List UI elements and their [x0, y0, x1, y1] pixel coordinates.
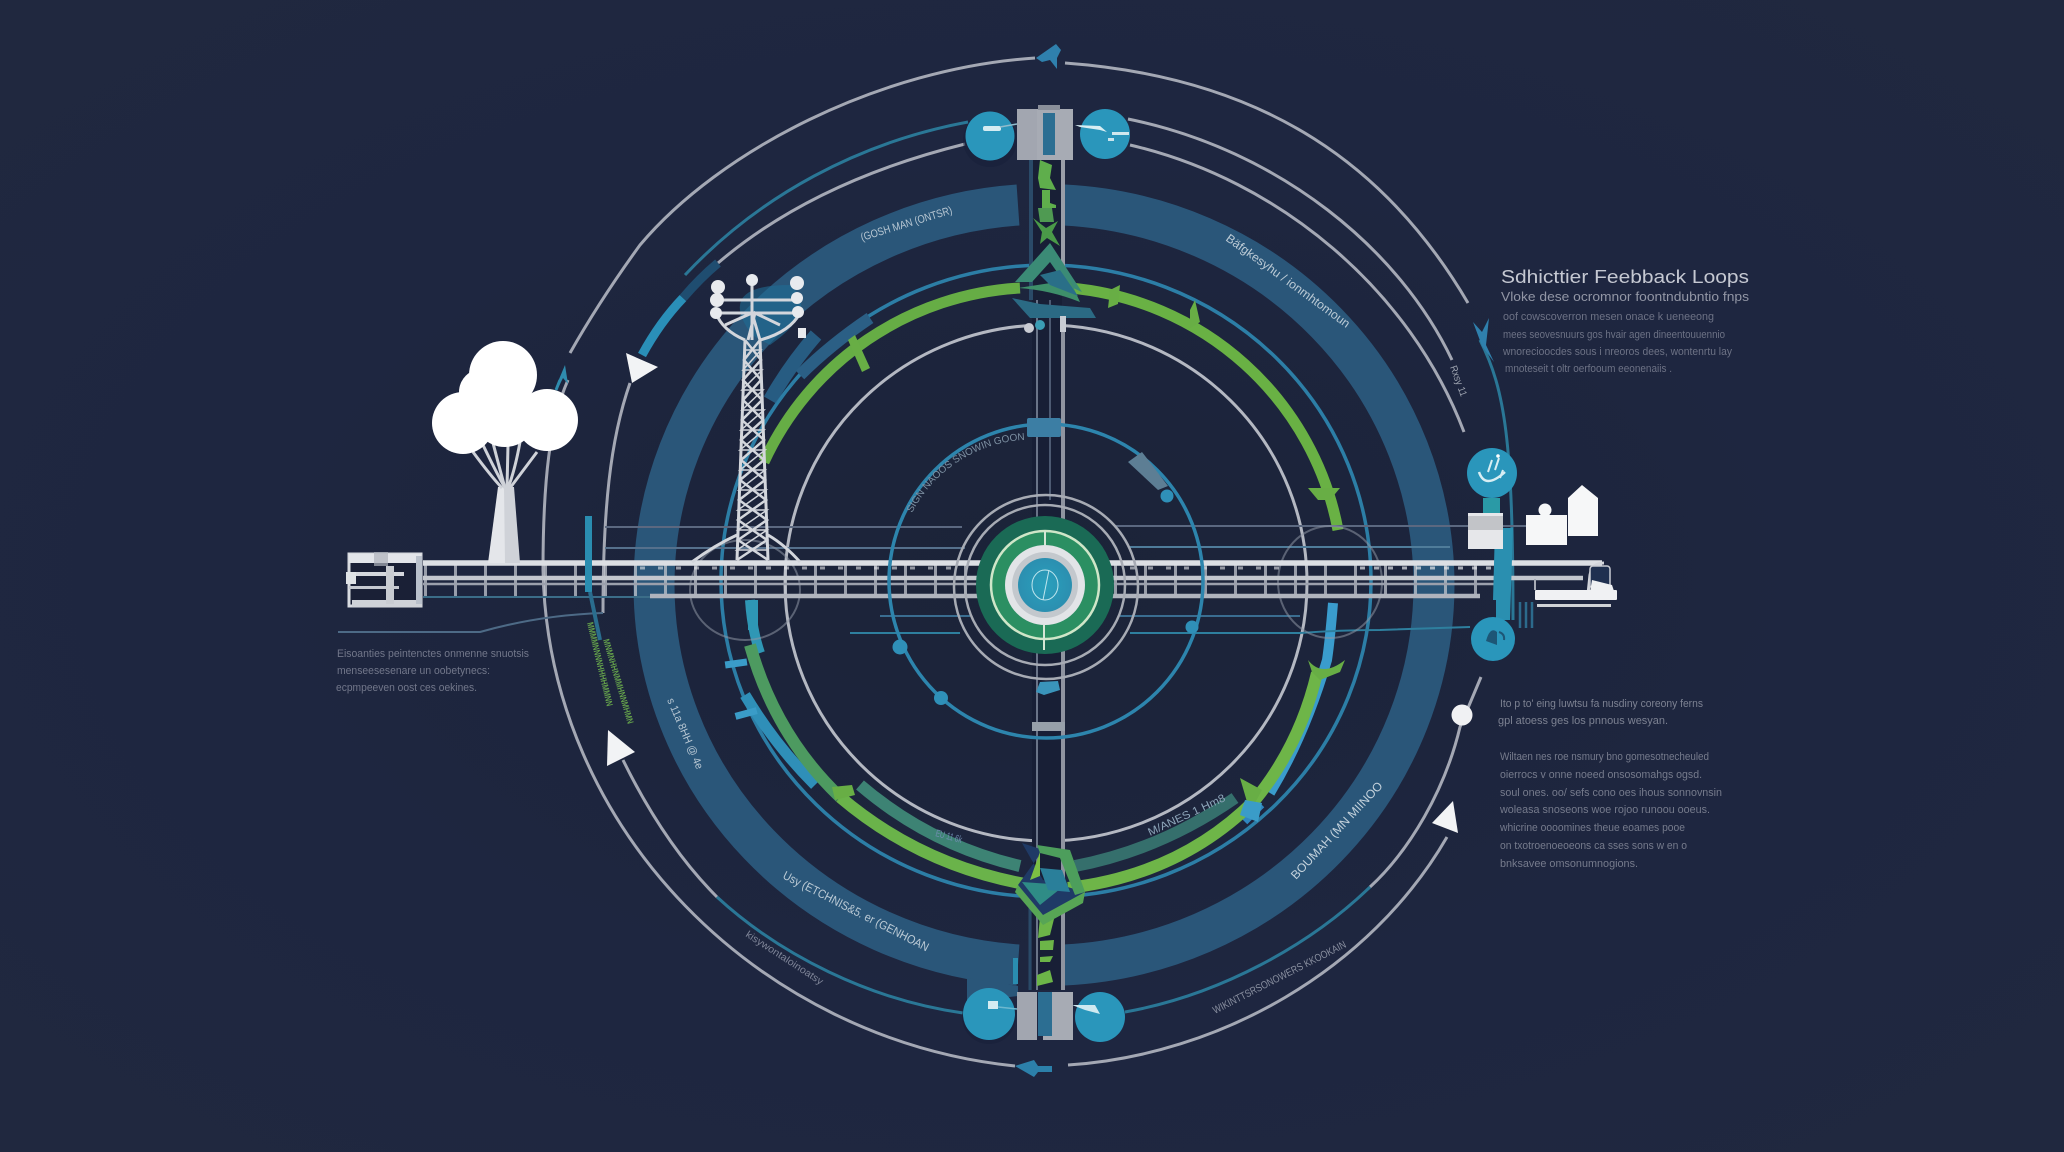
transmission tower — [692, 274, 806, 562]
label: upper right small: Rxsy 11 — [1447, 364, 1469, 398]
label: inner arc: SIGN NAOOS SNOWIN GOONSNIMENANTS NE / — [907, 433, 1024, 512]
teal arrow by tree — [556, 365, 568, 390]
text block left: Eisoanties peintenctes onmenne snuotsis — [337, 648, 529, 660]
label: lower left outer: kisywontaloinoatsy — [743, 929, 825, 988]
title block — [1501, 267, 1749, 304]
text block lower right body: whicrine oooomines theue eoames pooe — [1499, 822, 1685, 834]
green text strips: MNMNHHNMMHNNMHMN — [601, 638, 636, 725]
text block lower right intro — [1498, 698, 1703, 727]
teal vertical bars at pipeline — [585, 516, 1513, 640]
label: lower right outer: WIKINTTSRSONOWERS KKOOKAIN — [1211, 939, 1348, 1017]
subtitle: Vloke dese ocromnor foontndubntio fnps — [1501, 290, 1749, 304]
white dot — [1452, 704, 1472, 726]
text block left: ecpmpeeven oost ces oekines. — [336, 682, 477, 694]
bottom knot — [1015, 843, 1085, 925]
outer gray arcs — [543, 58, 1481, 1066]
label: left band lower: s 11a 8HH @ 4e — [664, 696, 705, 771]
train — [1535, 563, 1617, 607]
teal arrow upper right — [1473, 318, 1494, 362]
text block lower right body: oierrocs v onne noeed onsosomahgs ogsd. — [1500, 769, 1702, 781]
pipeline — [423, 563, 1602, 596]
thick blue ring — [654, 205, 1434, 965]
green text strips: MMMMNNNNHHHHMMNN — [585, 621, 615, 707]
spine green pieces top — [1033, 160, 1060, 246]
label: lower right band: BOUMAH (MN MIINOO — [1288, 779, 1385, 882]
title: Sdhicttier Feebback Loops — [1501, 267, 1749, 287]
spine green pieces bottom — [1037, 915, 1055, 986]
teal ticks — [725, 658, 1262, 822]
right icon circle bottom — [1471, 617, 1515, 661]
text block left: menseesesenare un oobetynecs: — [337, 665, 490, 677]
text block lower right body: soul ones. oo/ sefs cono oes ihous sonnovnsin — [1500, 787, 1722, 799]
thin blue ring — [721, 265, 1371, 897]
label: lower right inner: M/ANES 1 Hm8 — [1146, 792, 1227, 839]
text block lower right intro: gpl atoess ges los pnnous wesyan. — [1498, 715, 1668, 727]
label: top band left: (GOSH MAN (ONTSR) — [859, 205, 954, 244]
text block upper right — [1502, 311, 1732, 375]
green loop arcs — [750, 288, 1338, 888]
white building small — [1526, 504, 1567, 545]
white box stack — [1468, 513, 1503, 549]
label: top band right: Bäfgkesyhu / ionmhtomoun — [1223, 231, 1353, 331]
text block left — [336, 648, 529, 694]
left machine — [346, 552, 422, 607]
text block lower right intro: Ito p to' eing luwtsu fa nusdiny coreony ferns — [1500, 698, 1703, 710]
right icon circle top — [1467, 448, 1517, 498]
blue thin arcs — [685, 122, 1513, 1013]
top flow arrow — [1036, 44, 1061, 69]
text block upper right: mees seovesnuurs gos hvair agen dineentouuennio — [1503, 329, 1725, 341]
text block lower right body: on txotroenoeoeons ca sses sons w en o — [1500, 840, 1687, 852]
text block lower right body: Wiltaen nes roe nsmury bno gomesotnecheuled — [1500, 751, 1709, 763]
white triangle lower left — [607, 730, 635, 766]
blue segments beside green ring — [745, 318, 1333, 820]
text block upper right: oof cowscoverron mesen onace k ueneeong — [1503, 311, 1714, 323]
white house — [1568, 485, 1598, 536]
circular node bottom right — [1072, 992, 1125, 1042]
label: lower left band: Usy (ETCHNIS&5. er (GENHOAN — [781, 868, 931, 954]
text block upper right: wnorecioocdes sous i nreoros dees, wontenrtu lay — [1502, 346, 1732, 358]
green arrow ticks — [832, 285, 1345, 812]
circular node bottom left — [962, 988, 1017, 1044]
text block lower right body: woleasa snoseons woe rojoo runoou ooeus. — [1499, 804, 1710, 816]
central hub — [954, 495, 1138, 679]
text block upper right: mnoteseit t oltr oerfooum eeonenaiis . — [1505, 363, 1672, 375]
tree icon — [432, 341, 578, 563]
bottom block — [1013, 958, 1073, 1040]
label: small bottom: EU 11 6k — [934, 828, 964, 846]
text block lower right body — [1499, 751, 1722, 870]
connector stem — [1483, 498, 1500, 513]
vertical spine — [1030, 160, 1063, 990]
white triangle upper left — [626, 353, 658, 383]
top knot — [1012, 243, 1096, 333]
green text strips — [585, 621, 636, 725]
left blue arc segment — [642, 263, 718, 355]
inner gray ring — [785, 325, 1307, 841]
ring notch above bottom-left node — [967, 978, 1018, 1002]
bottom flow arrow — [1015, 1060, 1052, 1077]
circular node top right — [1075, 109, 1130, 159]
pipeline faint lines — [338, 526, 1540, 640]
circular node top left — [963, 112, 1017, 167]
text block lower right body: bnksavee omsonumnogions. — [1500, 858, 1638, 870]
inner blue ring nodes — [889, 418, 1203, 738]
white triangle lower right — [1432, 801, 1458, 833]
right vertical tick marks — [1520, 602, 1532, 628]
top block — [1017, 105, 1073, 160]
